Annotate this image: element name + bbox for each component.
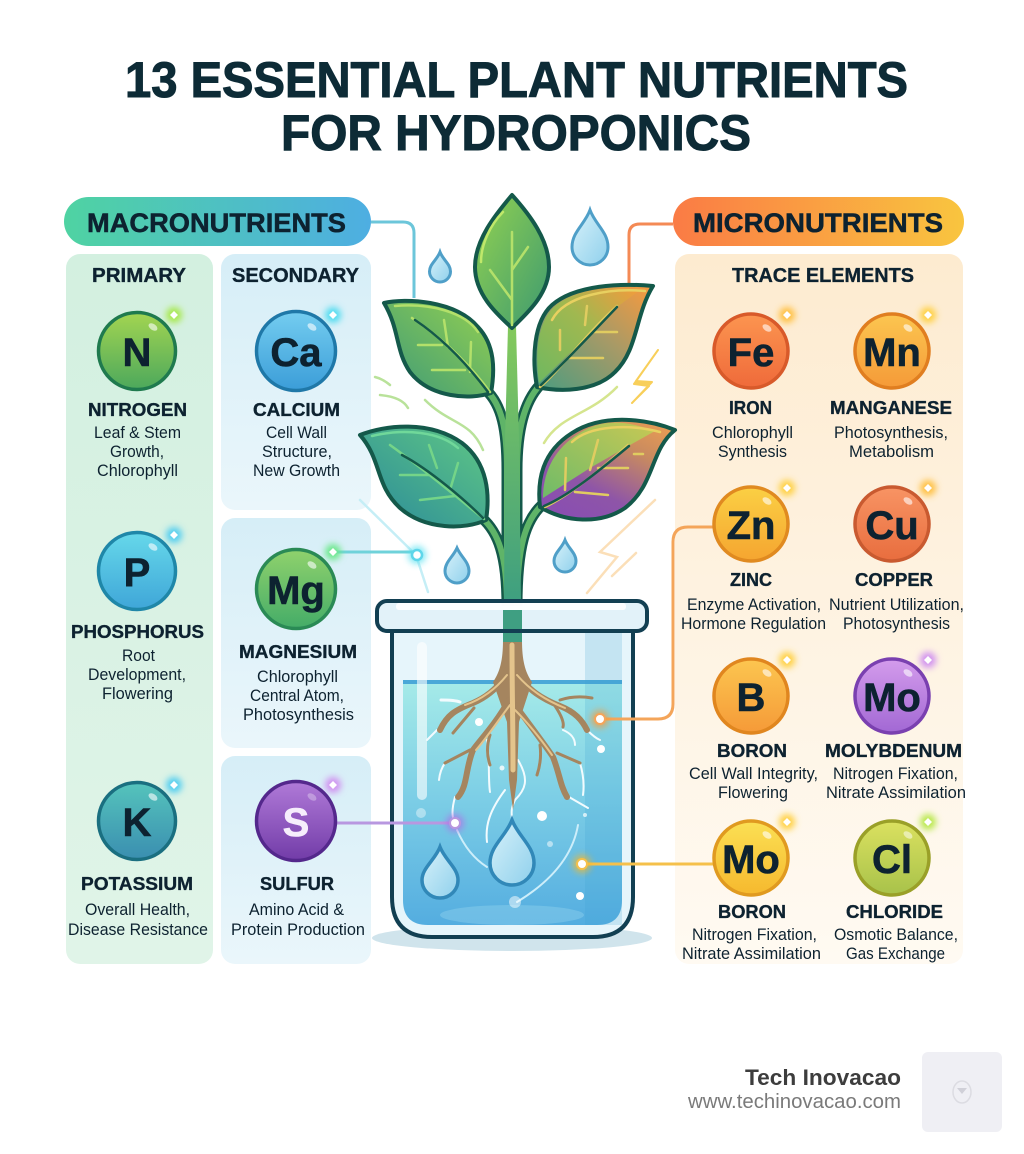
leaf veins	[390, 232, 643, 519]
stem inside rim	[503, 610, 522, 642]
nutrient: phosphorus: Development,	[88, 665, 186, 684]
nutrient: magnesium: Photosynthesis	[243, 705, 354, 724]
nutrient: sulfur	[231, 777, 365, 939]
subheading: secondary: SECONDARY	[232, 265, 360, 287]
nutrient: magnesium: Central Atom,	[250, 686, 344, 705]
nutrient: copper: Cu	[865, 504, 919, 548]
nutrient: potassium: K	[123, 801, 152, 845]
nutrient: boron (molybdenum symbol): Nitrogen Fixation,	[692, 925, 817, 944]
subheading: primary: PRIMARY	[92, 265, 187, 287]
nutrient: copper: Photosynthesis	[843, 614, 950, 633]
connector: micronutrients to leaf	[629, 224, 673, 284]
water drops	[430, 210, 608, 583]
nutrient: boron	[689, 652, 818, 802]
footer brand text: www.techinovacao.com	[687, 1091, 901, 1113]
connector: magnesium to plant	[336, 546, 426, 564]
nutrient: manganese: Metabolism	[849, 442, 934, 461]
nutrient: iron	[712, 307, 795, 461]
panel: secondary calcium background	[221, 254, 371, 510]
nutrient: phosphorus	[71, 527, 204, 703]
nutrient: molybdenum	[825, 652, 966, 802]
panel: trace elements background	[675, 254, 963, 964]
connector: sulfur to roots	[337, 814, 464, 832]
beaker rim	[377, 601, 647, 631]
nutrient: copper: Nutrient Utilization,	[829, 595, 964, 614]
nutrient: chloride: Cl	[872, 838, 912, 882]
heading: micronutrients	[673, 197, 964, 246]
nutrient: nitrogen: N	[123, 331, 151, 375]
beaker outline	[392, 632, 633, 937]
nutrient: magnesium: Mg	[267, 569, 325, 613]
heading: micronutrients: MICRONUTRIENTS	[693, 208, 943, 238]
nutrient: iron: IRON	[729, 398, 772, 418]
nutrient: potassium: Disease Resistance	[68, 920, 208, 939]
nutrient: calcium: CALCIUM	[253, 400, 340, 420]
nutrient: sulfur: Amino Acid &	[249, 900, 345, 919]
inner drops	[422, 820, 534, 898]
nutrient: nitrogen: Leaf & Stem	[94, 423, 181, 442]
nutrient: potassium	[68, 777, 208, 939]
nutrient: nitrogen	[88, 307, 187, 480]
footer brand text	[687, 1065, 901, 1113]
nutrient: manganese: Mn	[863, 331, 921, 375]
roots	[493, 640, 532, 810]
nutrient: phosphorus: Flowering	[102, 684, 173, 703]
nutrient: chloride: Gas Exchange	[846, 944, 945, 963]
lightning bolt	[632, 350, 658, 403]
nutrient: calcium	[253, 307, 341, 480]
connector: boron to water	[573, 855, 714, 873]
motion lines	[360, 377, 655, 593]
nutrient: chloride: CHLORIDE	[846, 902, 943, 922]
nutrient: magnesium	[239, 544, 357, 724]
nutrient: copper	[829, 480, 964, 633]
connector: macronutrients to leaf	[371, 222, 414, 298]
panel: secondary magnesium background	[221, 518, 371, 748]
nutrient: zinc: ZINC	[730, 570, 772, 590]
nutrient: molybdenum: Mo	[863, 676, 921, 720]
nutrient: iron: Fe	[728, 331, 774, 375]
nutrient: sulfur: SULFUR	[260, 874, 334, 894]
nutrient: manganese: Photosynthesis,	[834, 423, 948, 442]
nutrient: nitrogen: NITROGEN	[88, 400, 187, 420]
nutrient: magnesium: MAGNESIUM	[239, 642, 357, 662]
nutrient: boron (molybdenum symbol): Nitrate Assimilation	[682, 944, 821, 963]
nutrient: phosphorus: PHOSPHORUS	[71, 622, 204, 642]
nutrient: manganese	[830, 307, 952, 461]
illustration: plant in beaker	[360, 195, 675, 951]
stems	[482, 385, 542, 606]
heading: macronutrients	[64, 197, 371, 246]
nutrient: phosphorus: P	[124, 551, 150, 595]
nutrient: molybdenum: MOLYBDENUM	[825, 741, 962, 761]
nutrient: sulfur: S	[283, 801, 309, 845]
nutrient: nitrogen: Chlorophyll	[97, 461, 178, 480]
nutrient: calcium: Structure,	[262, 442, 332, 461]
root hairs and bubbles	[427, 700, 600, 902]
footer logo placeholder	[922, 1052, 1002, 1132]
panel: secondary sulfur background	[221, 756, 371, 964]
title: FOR HYDROPONICS	[281, 105, 751, 161]
nutrient: calcium: Ca	[270, 331, 322, 375]
nutrient: boron: Flowering	[718, 783, 788, 802]
nutrient: nitrogen: Growth,	[110, 442, 164, 461]
nutrient: boron: Cell Wall Integrity,	[689, 764, 818, 783]
nutrient: potassium: POTASSIUM	[81, 874, 193, 894]
panel: primary macronutrients background	[66, 254, 213, 964]
nutrient: chloride: Osmotic Balance,	[834, 925, 958, 944]
dark leaf midribs	[402, 307, 629, 518]
nutrient: boron (molybdenum symbol)	[682, 814, 821, 963]
nutrient: iron: Synthesis	[718, 442, 787, 461]
heading: macronutrients: MACRONUTRIENTS	[87, 208, 346, 238]
nutrient: calcium: Cell Wall	[266, 423, 327, 442]
nutrient: zinc: Enzyme Activation,	[687, 595, 821, 614]
leaf highlights	[372, 212, 660, 448]
title	[125, 52, 908, 161]
beaker shadow	[372, 925, 652, 951]
beaker glass body	[392, 632, 633, 937]
nutrient: iron: Chlorophyll	[712, 423, 793, 442]
nutrient: phosphorus: Root	[122, 646, 155, 665]
nutrient: zinc	[681, 480, 826, 633]
nutrient: boron: BORON	[717, 741, 787, 761]
connector: zinc to water	[591, 527, 714, 728]
footer brand text: Tech Inovacao	[745, 1065, 901, 1090]
leaves	[360, 195, 675, 526]
subheading: trace elements: TRACE ELEMENTS	[732, 265, 914, 287]
nutrient: potassium: Overall Health,	[85, 900, 190, 919]
water	[403, 680, 622, 925]
nutrient: calcium: New Growth	[253, 461, 340, 480]
nutrient: zinc: Hormone Regulation	[681, 614, 826, 633]
nutrient: sulfur: Protein Production	[231, 920, 365, 939]
nutrient: boron (molybdenum symbol): Mo	[722, 838, 780, 882]
nutrient: molybdenum: Nitrate Assimilation	[826, 783, 966, 802]
nutrient: boron (molybdenum symbol): BORON	[718, 902, 786, 922]
nutrient: zinc: Zn	[727, 504, 775, 548]
nutrient: manganese: MANGANESE	[830, 398, 952, 418]
nutrient: boron: B	[737, 676, 765, 720]
nutrient: copper: COPPER	[855, 570, 933, 590]
title: 13 ESSENTIAL PLANT NUTRIENTS	[125, 52, 908, 108]
nutrient: molybdenum: Nitrogen Fixation,	[833, 764, 958, 783]
nutrient: magnesium: Chlorophyll	[257, 667, 338, 686]
nutrient: chloride	[834, 814, 958, 963]
